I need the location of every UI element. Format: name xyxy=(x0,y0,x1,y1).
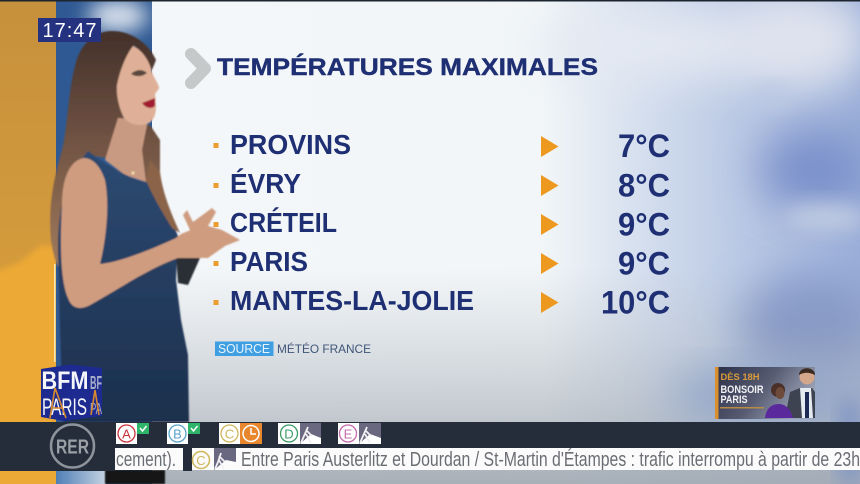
arm and hands xyxy=(61,158,240,308)
logo: BFM Paris: PARIS xyxy=(42,394,87,421)
rear arm xyxy=(176,255,200,285)
icon: ticker line C works: C xyxy=(196,453,206,468)
promo thumbnail: Bonsoir Paris xyxy=(715,367,815,419)
left gold panel xyxy=(0,2,56,484)
hair strand over dress xyxy=(146,160,180,233)
face xyxy=(117,46,159,125)
temperature row: Créteil: 9°C xyxy=(618,206,670,242)
line E status: E xyxy=(344,426,353,442)
logo: BFM Paris: BFM xyxy=(42,367,88,395)
temperature row: Provins xyxy=(214,128,670,164)
ticker band xyxy=(0,422,860,471)
source credit: MÉTÉO FRANCE xyxy=(277,341,371,356)
presenter xyxy=(50,31,240,484)
logo: BFM Paris: BF xyxy=(90,373,102,393)
temperature row: Mantes-la-Jolie: 10°C xyxy=(601,284,670,320)
eye xyxy=(131,70,147,76)
neck and chest xyxy=(105,118,148,182)
source credit: SOURCE xyxy=(218,342,270,356)
hair xyxy=(50,31,160,268)
necklace xyxy=(132,172,134,174)
icon: RER roundel: RER xyxy=(56,436,89,458)
line C status: C xyxy=(225,426,234,442)
legs below ticker xyxy=(105,470,165,484)
line A status: A xyxy=(122,426,131,442)
promo thumbnail: Bonsoir Paris: BONSOIR xyxy=(720,384,764,396)
source credit xyxy=(215,341,371,356)
temperature row: Provins: PROVINS xyxy=(230,129,351,160)
line C status xyxy=(219,423,262,444)
ticker text: end of previous item: cement). xyxy=(116,449,176,471)
line D status xyxy=(278,423,321,444)
line E status xyxy=(338,423,381,444)
temperature row: Paris: PARIS xyxy=(230,246,308,277)
temperature row: Mantes-la-Jolie xyxy=(214,284,670,320)
top black line xyxy=(0,0,860,2)
temperature row: Créteil xyxy=(214,206,670,242)
icon: RER roundel xyxy=(51,424,94,468)
icon: ticker line C works xyxy=(192,448,236,470)
logo: BFM Paris: PA xyxy=(90,401,102,418)
temperature row: Mantes-la-Jolie: MANTES-LA-JOLIE xyxy=(230,285,474,316)
promo thumbnail: Bonsoir Paris: DÈS 18H xyxy=(720,372,760,383)
line B status xyxy=(167,423,200,444)
temperature row: Paris xyxy=(214,246,670,282)
lips xyxy=(142,98,155,108)
temperature row: Évry xyxy=(214,168,670,204)
temperature row: Paris: 9°C xyxy=(618,246,670,282)
promo thumbnail: Bonsoir Paris: PARIS xyxy=(720,394,748,406)
clock: 17:47 xyxy=(42,20,96,42)
temperature row: Provins: 7°C xyxy=(618,128,670,164)
logo: BFM Paris xyxy=(41,364,102,421)
temperature row: Évry: ÉVRY xyxy=(230,168,301,199)
temperature row: Créteil: CRÉTEIL xyxy=(230,207,337,238)
temperature row: Évry: 8°C xyxy=(618,168,670,204)
title: TEMPÉRATURES MAXIMALES xyxy=(217,53,598,81)
icon: grey chevron xyxy=(191,54,205,83)
line B status: B xyxy=(173,426,182,442)
blue sky strip xyxy=(56,0,152,484)
line D status: D xyxy=(284,426,294,442)
dress xyxy=(58,151,189,422)
line A status xyxy=(116,423,149,444)
